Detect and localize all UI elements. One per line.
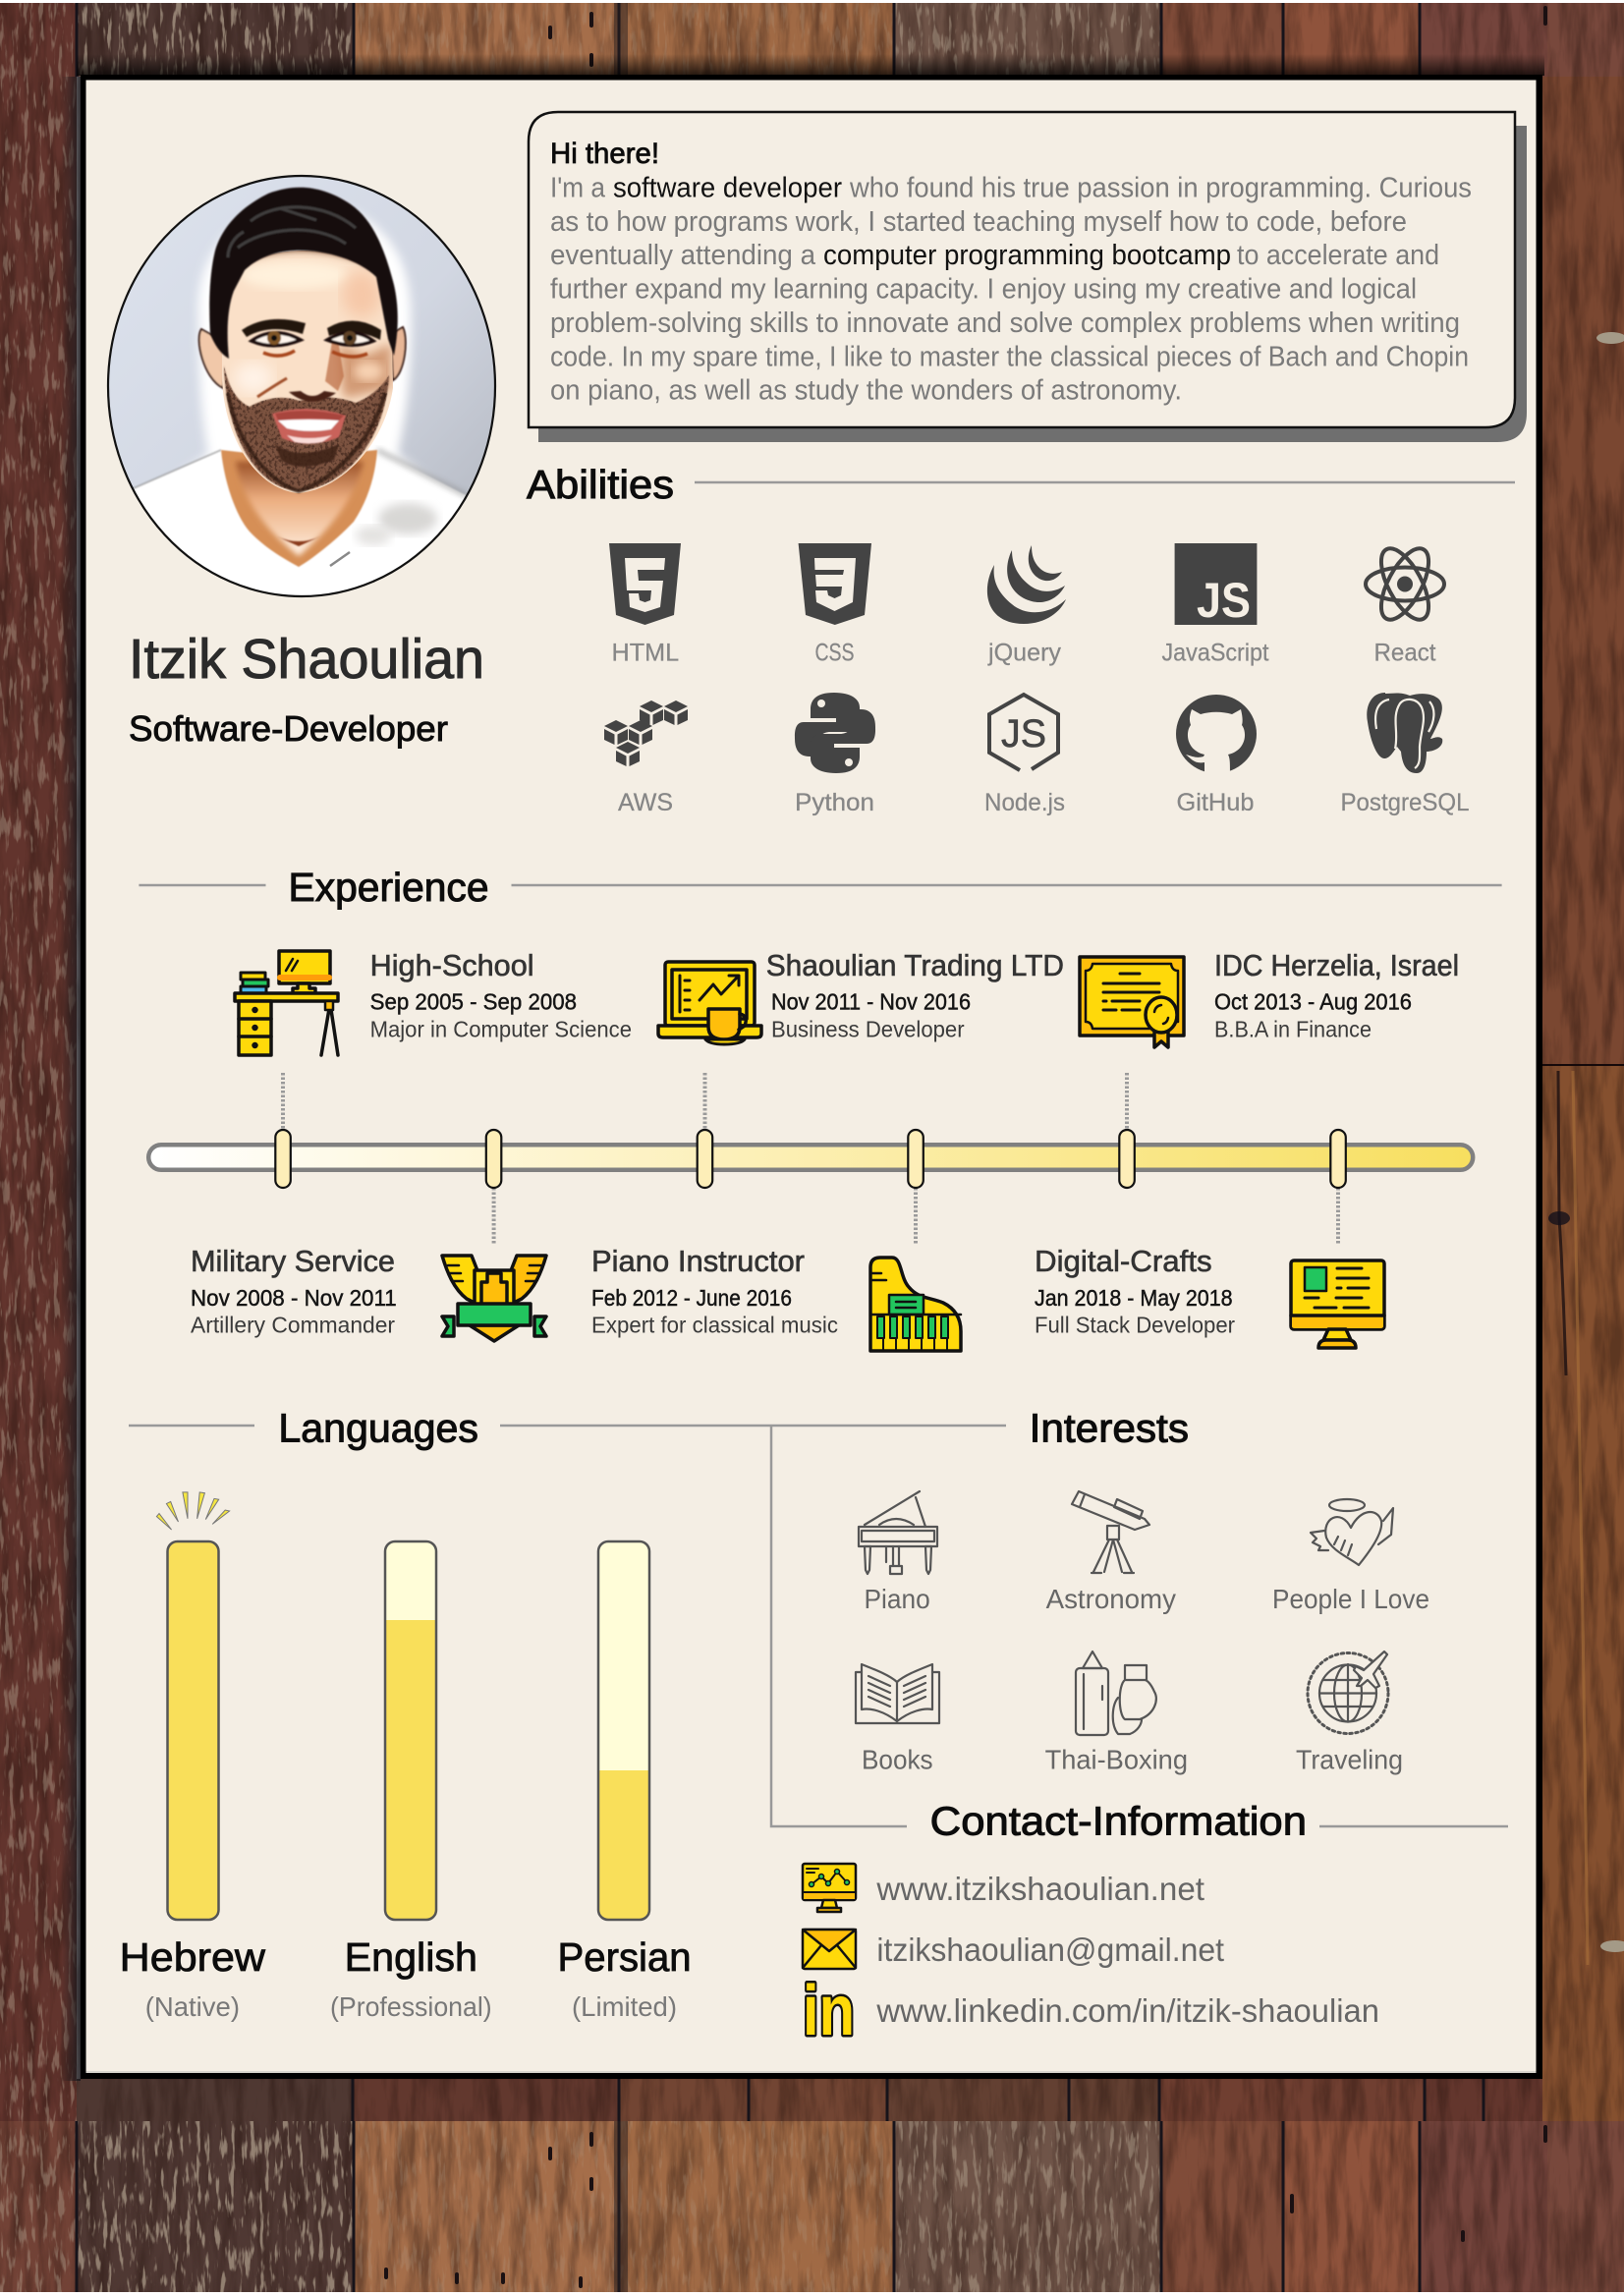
intro heading: Hi there! [550,138,659,170]
skill: Python [795,693,875,816]
entry: Military Service: Nov 2008 - Nov 2011 [191,1285,397,1311]
name: Itzik Shaoulian [129,628,484,691]
nose and eyes [242,319,381,402]
interest: astronomy: Astronomy [1046,1584,1176,1614]
entry: High-School: Sep 2005 - Sep 2008 [370,989,577,1015]
entry: High-School: High-School [370,948,534,982]
entry: Piano Instructor: Expert for classical music [591,1313,838,1338]
timeline track [148,1145,1473,1170]
skill: CSS [799,543,871,667]
interest: piano: Piano [865,1584,930,1614]
skill: HTML: HTML [611,640,679,667]
interest: thai-boxing [1045,1652,1188,1775]
intro paragraph: who found his true passion in programming. Curious [849,173,1472,204]
panel: languages [120,1406,1508,2022]
icon: certificate [1080,957,1184,1047]
entry: Military Service: Artillery Commander [191,1313,395,1338]
intro paragraph: software developer [613,173,842,204]
entry: IDC Herzelia: IDC Herzelia, Israel [1214,948,1459,982]
skill: PostgreSQL [1340,693,1470,816]
beard [224,365,389,491]
skill: Node.js: JS [1001,712,1046,756]
intro paragraph: on piano, as well as study the wonders of astronomy. [550,375,1182,407]
bar: Persian [558,1541,692,2022]
contact heading: Contact-Information [930,1798,1307,1843]
face [222,251,393,493]
entry: IDC Herzelia: B.B.A in Finance [1214,1016,1372,1041]
bar: English: (Professional) [330,1991,492,2022]
interest: books [856,1664,939,1775]
skill: AWS [604,700,688,816]
skill: jQuery [987,545,1066,667]
entry: High-School [370,948,632,1041]
sparks above Hebrew [156,1492,230,1530]
skill: GitHub [1176,695,1257,816]
intro paragraph: problem-solving skills to innovate and solve complex problems when writing [550,308,1460,339]
bar: English [330,1541,492,2022]
skill: jQuery: jQuery [987,640,1061,667]
icon: grand piano [870,1258,961,1351]
interest: astronomy [1046,1491,1176,1614]
panel: contact information [803,1798,1379,2050]
icon: military crest [442,1256,546,1341]
entry: Digital-Crafts: Full Stack Developer [1035,1313,1235,1338]
card panel [81,75,1542,2079]
entry: Digital-Crafts: Digital-Crafts [1035,1244,1212,1278]
intro paragraph: computer programming bootcamp [823,240,1231,271]
skill: HTML [609,543,681,667]
bar: Hebrew: Hebrew [120,1934,265,1980]
icon: laptop chart [658,962,761,1044]
entry: Piano Instructor: Feb 2012 - June 2016 [591,1285,792,1311]
skill: AWS: AWS [618,789,673,816]
entry: Military Service: Military Service [191,1244,395,1278]
skill: CSS: CSS [815,640,855,667]
shirt [134,446,468,595]
languages heading: Languages [278,1406,478,1451]
intro paragraph: further expand my learning capacity. I enjoy using my creative and logical [550,273,1417,305]
entry: Shaoulian Trading LTD: Shaoulian Trading LTD [766,948,1064,982]
interest: piano [859,1491,937,1614]
icon: desk [235,951,338,1055]
entry: Piano Instructor [591,1244,838,1338]
name and role [129,628,484,749]
entry: Digital-Crafts [1035,1244,1235,1338]
intro paragraph: to accelerate and [1237,240,1439,271]
experience heading: Experience [289,865,489,910]
entry: Shaoulian Trading LTD: Nov 2011 - Nov 2016 [771,989,971,1015]
skill: React: React [1373,640,1436,667]
skill: React [1366,541,1444,667]
skill: Python: Python [795,789,874,816]
entry: Military Service [191,1244,397,1338]
hair [209,188,398,359]
entry: Piano Instructor: Piano Instructor [591,1244,805,1278]
entry: Shaoulian Trading LTD: Business Developer [771,1016,965,1041]
panel: interests [856,1406,1429,1775]
interest: thai-boxing: Thai-Boxing [1045,1745,1188,1775]
interest: people I love: People I Love [1272,1584,1429,1614]
contact: linkedin [803,1972,1379,2050]
panel: experience [139,865,1502,1351]
interest: books: Books [862,1745,933,1775]
bar: Persian: Persian [558,1934,692,1980]
timeline connectors [283,1073,1338,1244]
bar: Hebrew: (Native) [145,1991,240,2022]
entry: IDC Herzelia [1214,948,1459,1041]
skill: JavaScript: JavaScript [1161,640,1269,667]
intro paragraph: code. In my spare time, I like to master the classical pieces of Bach and Chopin [550,341,1469,372]
mouth [272,409,346,444]
intro paragraph: as to how programs work, I started teaching myself how to code, before [550,206,1407,238]
bar: Hebrew [120,1541,265,2022]
entry: IDC Herzelia: Oct 2013 - Aug 2016 [1214,989,1412,1015]
interest: traveling [1296,1652,1403,1775]
contact: website [803,1864,1204,1912]
contact: linkedin: www.linkedin.com/in/itzik-shaoulian [875,1992,1379,2029]
contact: website: www.itzikshaoulian.net [875,1871,1204,1907]
intro paragraph: I'm a [550,173,606,204]
interest: people I love [1272,1499,1429,1614]
bar: English: English [345,1934,477,1980]
neck [221,450,377,567]
entry: Digital-Crafts: Jan 2018 - May 2018 [1035,1285,1233,1311]
panel: intro bubble [529,112,1527,442]
skill: Node.js: Node.js [984,789,1065,816]
role: Software-Developer [129,708,448,749]
panel: abilities [527,462,1515,816]
entry: Shaoulian Trading LTD [766,948,1064,1041]
bar: Persian: (Limited) [572,1991,677,2022]
skill: GitHub: GitHub [1177,789,1254,816]
portrait photo [108,176,501,609]
contact: email: itzikshaoulian@gmail.net [876,1932,1224,1968]
skill: JavaScript [1161,543,1269,667]
interest: traveling: Traveling [1296,1745,1403,1775]
intro paragraph [550,173,1472,407]
intro paragraph: eventually attending a [550,240,816,271]
timeline handles [275,1130,1346,1188]
contact: linkedin: in [803,1972,855,2050]
skill: JavaScript: JS [1197,573,1251,628]
ears [199,329,228,388]
interests heading: Interests [1030,1406,1189,1451]
skill: Node.js [984,695,1065,816]
entry: High-School: Major in Computer Science [370,1016,632,1041]
skill: PostgreSQL: PostgreSQL [1340,789,1470,816]
abilities heading: Abilities [527,462,674,507]
icon: desktop monitor [1291,1260,1384,1348]
